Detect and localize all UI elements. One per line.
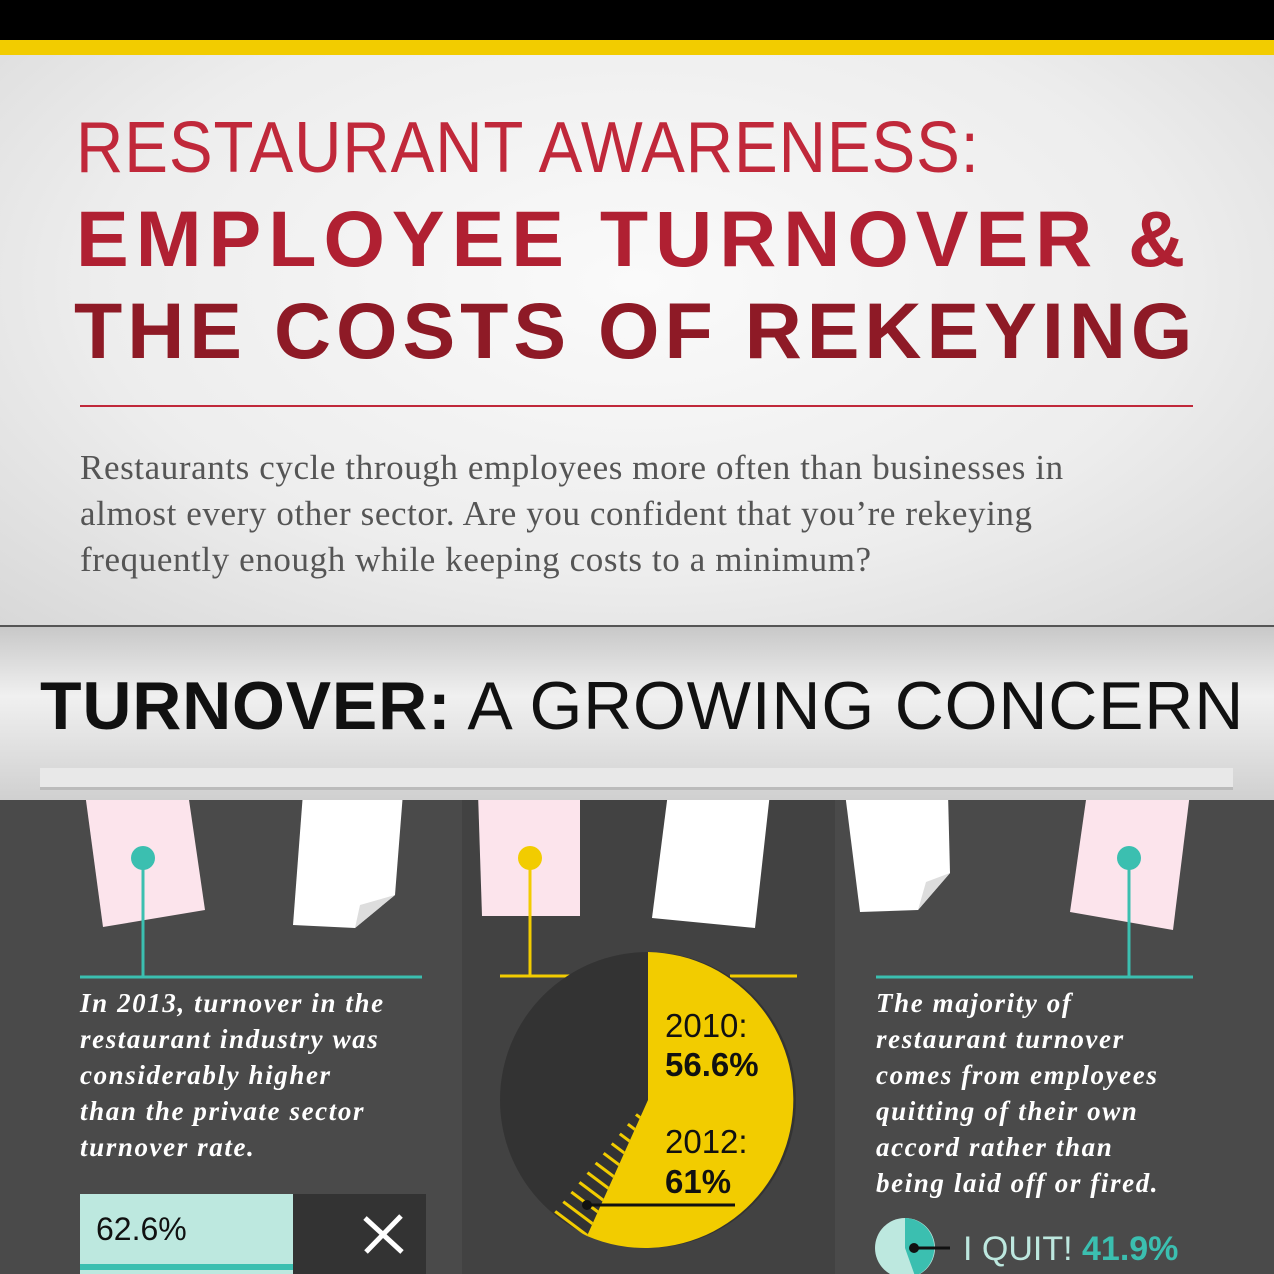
intro text: Restaurants cycle through employees more often than businesses in almost every other sector. Are you confident that you’re rekeying frequently enough while keeping costs to a minimum? xyxy=(80,448,1064,579)
title line 2: EMPLOYEE TURNOVER & xyxy=(76,194,1192,283)
text: right stat: being laid off or fired. xyxy=(876,1168,1159,1198)
text: right stat: restaurant turnover xyxy=(876,1024,1125,1054)
section heading band xyxy=(0,627,1274,800)
notes: papers xyxy=(85,793,1190,930)
text: left stat: In 2013, turnover in the xyxy=(79,988,385,1018)
pie chart: 2010: xyxy=(665,1007,748,1044)
pie chart: 56.6% xyxy=(665,1046,759,1083)
bar: 62.6% xyxy=(80,1194,426,1274)
red divider xyxy=(80,405,1193,407)
bar: 62.6%: 62.6% xyxy=(96,1211,187,1247)
text: right stat: The majority of xyxy=(876,988,1074,1018)
text: left stat: turnover rate. xyxy=(80,1132,255,1162)
text: left stat: than the private sector xyxy=(80,1096,365,1126)
I quit stat xyxy=(875,1218,1178,1274)
text: right stat: comes from employees xyxy=(876,1060,1158,1090)
header panel xyxy=(0,55,1274,627)
title line 3: THE COSTS OF REKEYING xyxy=(74,286,1197,375)
top black bar xyxy=(0,0,1274,40)
text: right stat: accord rather than xyxy=(876,1132,1113,1162)
I quit stat: I QUIT! 41.9% xyxy=(963,1230,1178,1268)
lower infographic xyxy=(79,800,1193,1274)
shelf xyxy=(40,768,1233,790)
pie chart: 2012: xyxy=(665,1123,748,1160)
text: right stat: quitting of their own xyxy=(876,1096,1138,1126)
text: left stat: restaurant industry was xyxy=(80,1024,379,1054)
title line 1: RESTAURANT AWARENESS: xyxy=(76,108,980,188)
pie chart: 61% xyxy=(665,1163,731,1200)
yellow stripe xyxy=(0,40,1274,55)
pie chart xyxy=(500,952,796,1248)
section heading: TURNOVER: A GROWING CONCERN xyxy=(40,668,1244,744)
pins and connectors xyxy=(80,846,1193,977)
text: left stat: considerably higher xyxy=(80,1060,332,1090)
